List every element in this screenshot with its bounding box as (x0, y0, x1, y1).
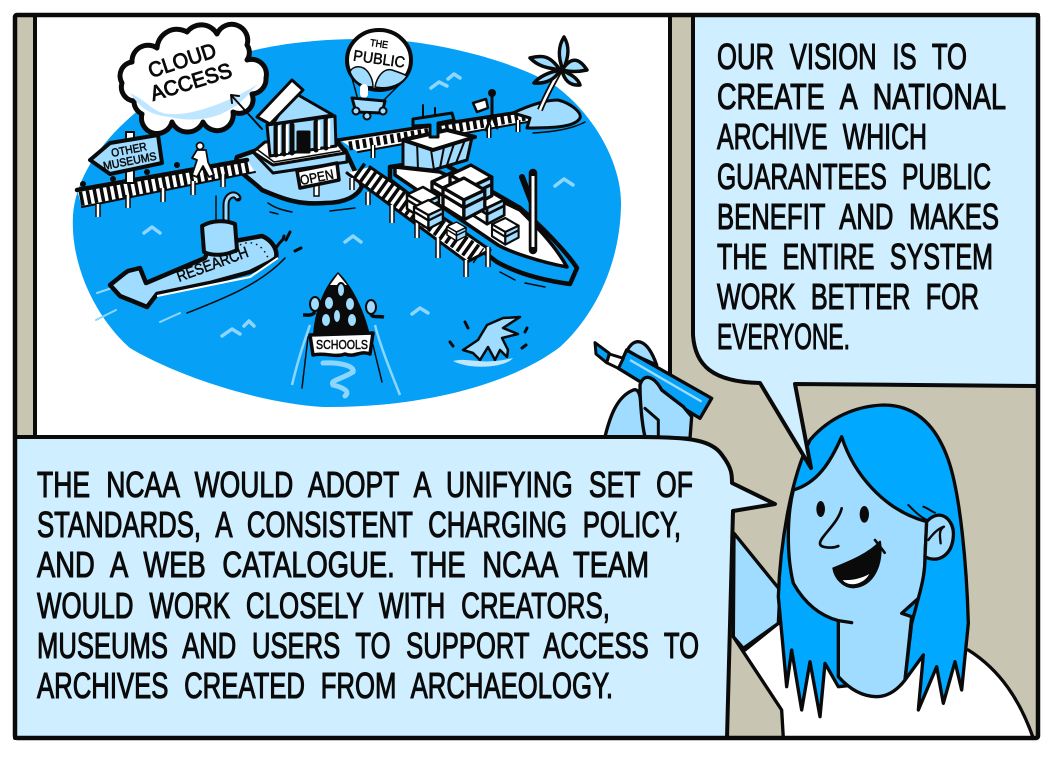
sign: open: OPEN (299, 167, 335, 188)
mast (522, 173, 533, 250)
eyes (816, 501, 825, 517)
island: museum (236, 135, 362, 203)
ear (925, 515, 953, 559)
figure: carrier with box (473, 89, 497, 130)
sign: other museums (90, 132, 162, 183)
boat: schools (292, 272, 400, 396)
ship ripples (500, 272, 545, 287)
mouth (833, 542, 881, 587)
sea (73, 39, 621, 407)
figure: walker (192, 142, 214, 177)
nose (820, 508, 842, 548)
shirt (733, 623, 1033, 738)
balloon: the public: THE (369, 38, 389, 51)
character: presenter (595, 342, 1033, 738)
speech bubble: bottom: AND A WEB CATALOGUE. THE NCAA TEAM (37, 544, 649, 585)
boat: schools: SCHOOLS (316, 337, 368, 352)
arm (733, 533, 780, 648)
speech bubble: bottom: WOULD WORK CLOSELY WITH CREATORS, (37, 585, 610, 626)
cloud: cloud access: CLOUD (145, 39, 219, 83)
sign: open (297, 163, 339, 196)
submarine: research: RESEARCH (175, 244, 251, 286)
hand with marker (595, 342, 712, 438)
speech bubble: bottom (15, 437, 775, 738)
panel: whiteboard (35, 15, 670, 437)
building: museum (253, 80, 347, 173)
bridge (403, 137, 472, 170)
cloud: cloud access: ACCESS (148, 59, 235, 106)
hair (778, 405, 968, 717)
balloon: the public (347, 30, 411, 120)
speech bubble: top right (693, 15, 1038, 468)
submarine: research (110, 195, 301, 313)
speech bubble: bottom: THE NCAA WOULD ADOPT A UNIFYING SET OF (37, 464, 693, 505)
crates (432, 165, 519, 245)
ship (390, 105, 577, 287)
island: palm (513, 37, 587, 133)
speech bubble: bottom: MUSEUMS AND USERS TO SUPPORT ACCESS TO (37, 625, 699, 666)
speech bubble: top right: ARCHIVE WHICH (717, 116, 927, 157)
antenna (413, 105, 454, 137)
island ripples (268, 203, 355, 214)
sign: other museums: OTHER (110, 141, 148, 160)
pier: left (77, 160, 255, 217)
hull (390, 160, 577, 284)
balloon: the public: PUBLIC (352, 48, 406, 72)
speech bubble: bottom: STANDARDS, A CONSISTENT CHARGING POLICY, (37, 504, 681, 545)
speech bubble: bottom: ARCHIVES CREATED FROM ARCHAEOLOGY. (37, 665, 613, 706)
dolphin (450, 317, 527, 367)
pier: upper right (338, 112, 533, 158)
pier: lower (347, 167, 490, 277)
sea waves (96, 74, 573, 336)
illustration: archive map (73, 24, 621, 407)
sign: other museums: MUSEUMS (102, 151, 158, 173)
cloud: cloud access (120, 24, 266, 134)
speech bubble: top right: EVERYONE. (717, 316, 850, 357)
face (788, 437, 927, 697)
